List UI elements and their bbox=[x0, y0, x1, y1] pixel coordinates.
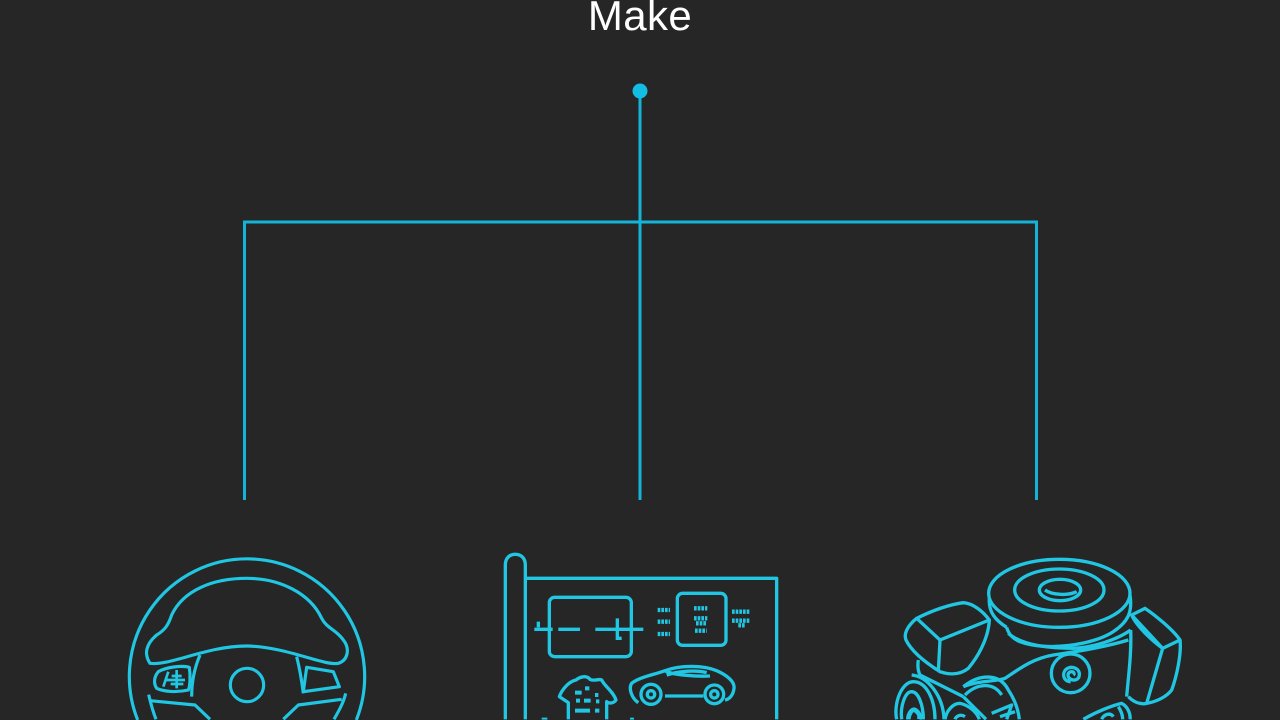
body bbox=[918, 630, 1131, 697]
icon: car bbox=[630, 666, 734, 703]
icon: blueprint bbox=[505, 554, 777, 719]
lower pulleys bbox=[896, 682, 935, 719]
tree connector bbox=[244, 84, 1036, 500]
right block bbox=[1132, 608, 1180, 648]
icon: engine bbox=[896, 559, 1180, 719]
centre port bbox=[1051, 654, 1090, 693]
icon: house bbox=[559, 677, 616, 719]
icon: steering wheel bbox=[129, 559, 365, 720]
left block bbox=[917, 603, 989, 640]
